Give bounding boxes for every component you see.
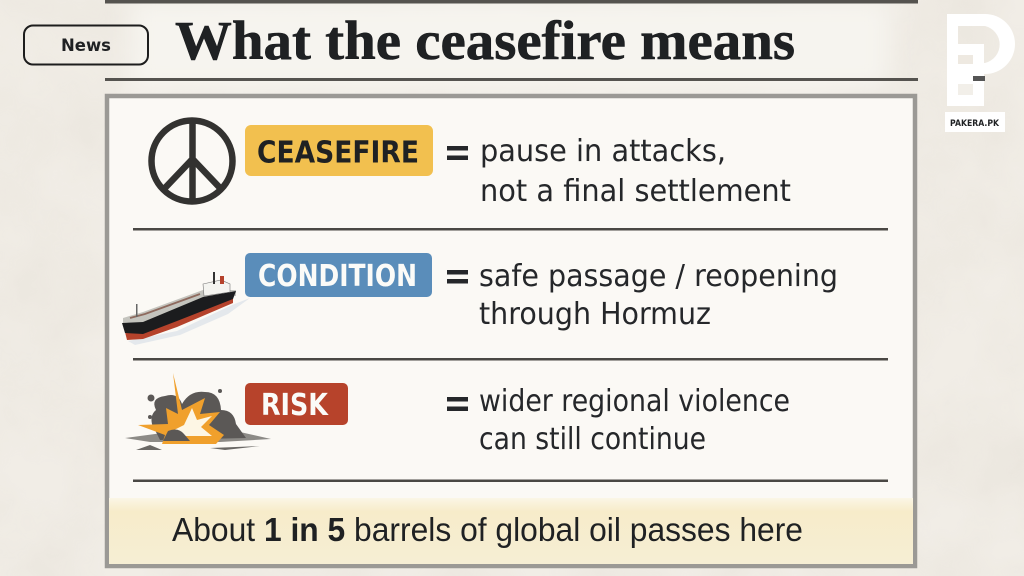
footer strip: About 1 in 5 barrels of global oil passes here	[172, 511, 803, 548]
text: condition definition	[447, 259, 838, 332]
news tag: News	[61, 36, 111, 56]
row: risk	[125, 373, 790, 457]
text: ceasefire definition	[447, 134, 791, 209]
icon: peace symbol	[152, 120, 232, 202]
text: risk definition	[447, 384, 790, 457]
text: ceasefire definition: pause in attacks,	[480, 134, 726, 169]
badge: risk	[245, 383, 348, 425]
title	[105, 0, 918, 81]
badge: condition: CONDITION	[258, 259, 417, 294]
badge: ceasefire	[245, 125, 433, 176]
badge: condition	[245, 253, 432, 297]
badge: risk: RISK	[261, 388, 329, 423]
main panel	[107, 96, 915, 566]
footer strip	[109, 498, 913, 564]
icon: explosion	[125, 373, 271, 450]
row: condition	[122, 253, 838, 345]
logo: pakera.pk	[945, 14, 1015, 132]
news tag	[24, 26, 148, 64]
title: What the ceasefire means	[175, 10, 795, 71]
text: risk definition: can still continue	[479, 422, 706, 457]
text: condition definition: safe passage / reopening	[479, 259, 838, 294]
logo: pakera.pk: PAKERA.PK	[950, 119, 999, 129]
text: condition definition: through Hormuz	[479, 297, 711, 332]
badge: ceasefire: CEASEFIRE	[257, 136, 419, 170]
text: risk definition: wider regional violence	[479, 384, 790, 419]
icon: oil tanker	[122, 272, 250, 345]
row: ceasefire	[152, 120, 791, 209]
text: ceasefire definition: not a final settlement	[480, 174, 791, 209]
